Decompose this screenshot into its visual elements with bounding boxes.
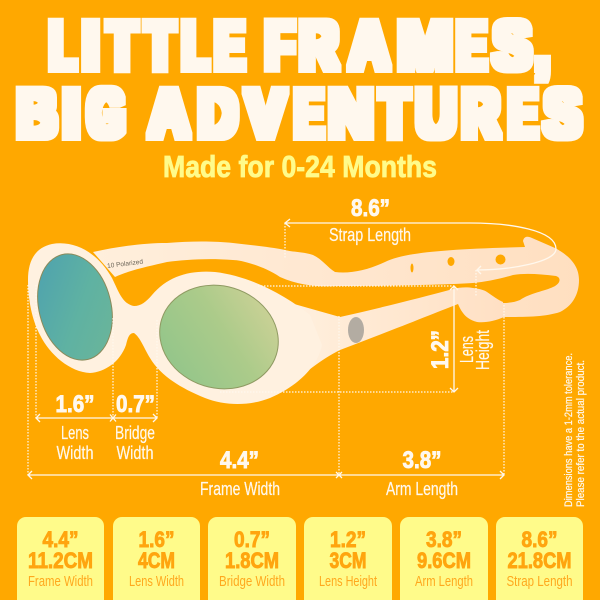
card: strap length: Strap Length — [506, 573, 572, 590]
title: N — [328, 75, 374, 152]
label: lens width: 1.6” — [56, 391, 94, 418]
label: strap length: Strap Length — [329, 225, 411, 245]
label: lens width: Width — [56, 443, 94, 463]
title: U — [416, 75, 456, 152]
card: lens width: Lens Width — [129, 573, 184, 590]
label: bridge width: 0.7” — [116, 391, 155, 418]
card: strap length: 8.6” — [522, 527, 558, 552]
card: arm length — [400, 517, 488, 600]
left lens — [27, 246, 123, 368]
dimension guides — [28, 219, 556, 479]
label: strap length — [329, 195, 411, 245]
title: D — [198, 75, 237, 152]
arm print: 10 Polarized — [107, 259, 144, 270]
label: lens height: 1.2” — [427, 330, 454, 369]
title: B — [17, 75, 57, 152]
label: bridge width: Width — [116, 443, 154, 463]
front frame — [28, 243, 322, 404]
far strap holes — [410, 264, 414, 272]
arm badge — [348, 317, 364, 343]
card: bridge width: 1.8CM — [225, 548, 279, 573]
label: lens height: Lens — [457, 336, 477, 363]
label: bridge width — [115, 391, 155, 463]
near arm — [280, 287, 504, 380]
label: lens width — [56, 391, 94, 463]
title: A — [149, 75, 189, 152]
card: lens width — [113, 517, 200, 600]
title: L — [50, 7, 75, 84]
label: lens height — [427, 330, 493, 370]
title — [17, 7, 581, 152]
card: lens height: 3CM — [330, 548, 366, 573]
title: R — [300, 7, 338, 84]
title: F — [266, 7, 294, 84]
title: V — [246, 75, 285, 152]
card: frame width: Frame Width — [28, 573, 93, 590]
title: T — [146, 7, 174, 84]
title: I — [82, 7, 100, 84]
tolerance note — [563, 353, 587, 507]
label: arm length: 3.8” — [402, 447, 442, 474]
label: frame width: Frame Width — [200, 479, 280, 499]
far arm and strap — [93, 237, 579, 317]
label: lens height: Height — [473, 330, 493, 370]
title: G — [88, 75, 124, 152]
card: arm length: 9.6CM — [417, 548, 471, 573]
label: strap length: 8.6” — [351, 195, 390, 222]
card: strap length — [496, 517, 583, 600]
card: bridge width: Bridge Width — [219, 573, 285, 590]
title: S — [493, 7, 531, 84]
title: , — [536, 7, 549, 84]
card: lens height: 1.2” — [330, 527, 366, 552]
card: lens height: Lens Height — [319, 573, 378, 590]
label: arm length — [386, 447, 458, 499]
title: E — [457, 7, 486, 84]
title: M — [397, 7, 453, 84]
card: lens width: 1.6” — [138, 527, 174, 552]
subtitle: Made for 0-24 Months — [163, 149, 437, 184]
title: E — [295, 75, 323, 152]
label: arm length: Arm Length — [386, 479, 458, 499]
label: frame width — [200, 447, 280, 499]
card: frame width: 4.4” — [42, 527, 78, 552]
card: lens height — [304, 517, 392, 600]
tolerance note: Please refer to the actual product. — [575, 360, 587, 507]
card: strap length: 21.8CM — [508, 548, 572, 573]
tolerance note: Dimensions have a 1-2mm tolerance. — [563, 353, 575, 507]
title: T — [108, 7, 136, 84]
title: A — [350, 7, 389, 84]
card: arm length: 3.8” — [426, 527, 462, 552]
title: T — [380, 75, 409, 152]
title: S — [544, 75, 581, 152]
title: R — [462, 75, 499, 152]
label: bridge width: Bridge — [115, 423, 155, 443]
right lens — [147, 271, 291, 403]
card: lens width: 4CM — [138, 548, 175, 573]
card: frame width: 11.2CM — [28, 548, 93, 573]
card: bridge width: 0.7” — [234, 527, 270, 552]
title: I — [62, 75, 80, 152]
title: L — [183, 7, 208, 84]
card: arm length: Arm Length — [415, 573, 473, 590]
sunglasses illustration — [27, 237, 579, 404]
card: bridge width — [208, 517, 296, 600]
title: E — [509, 75, 537, 152]
title: E — [215, 7, 244, 84]
card: frame width — [17, 517, 104, 600]
label: lens width: Lens — [61, 423, 89, 443]
label: frame width: 4.4” — [220, 447, 259, 474]
